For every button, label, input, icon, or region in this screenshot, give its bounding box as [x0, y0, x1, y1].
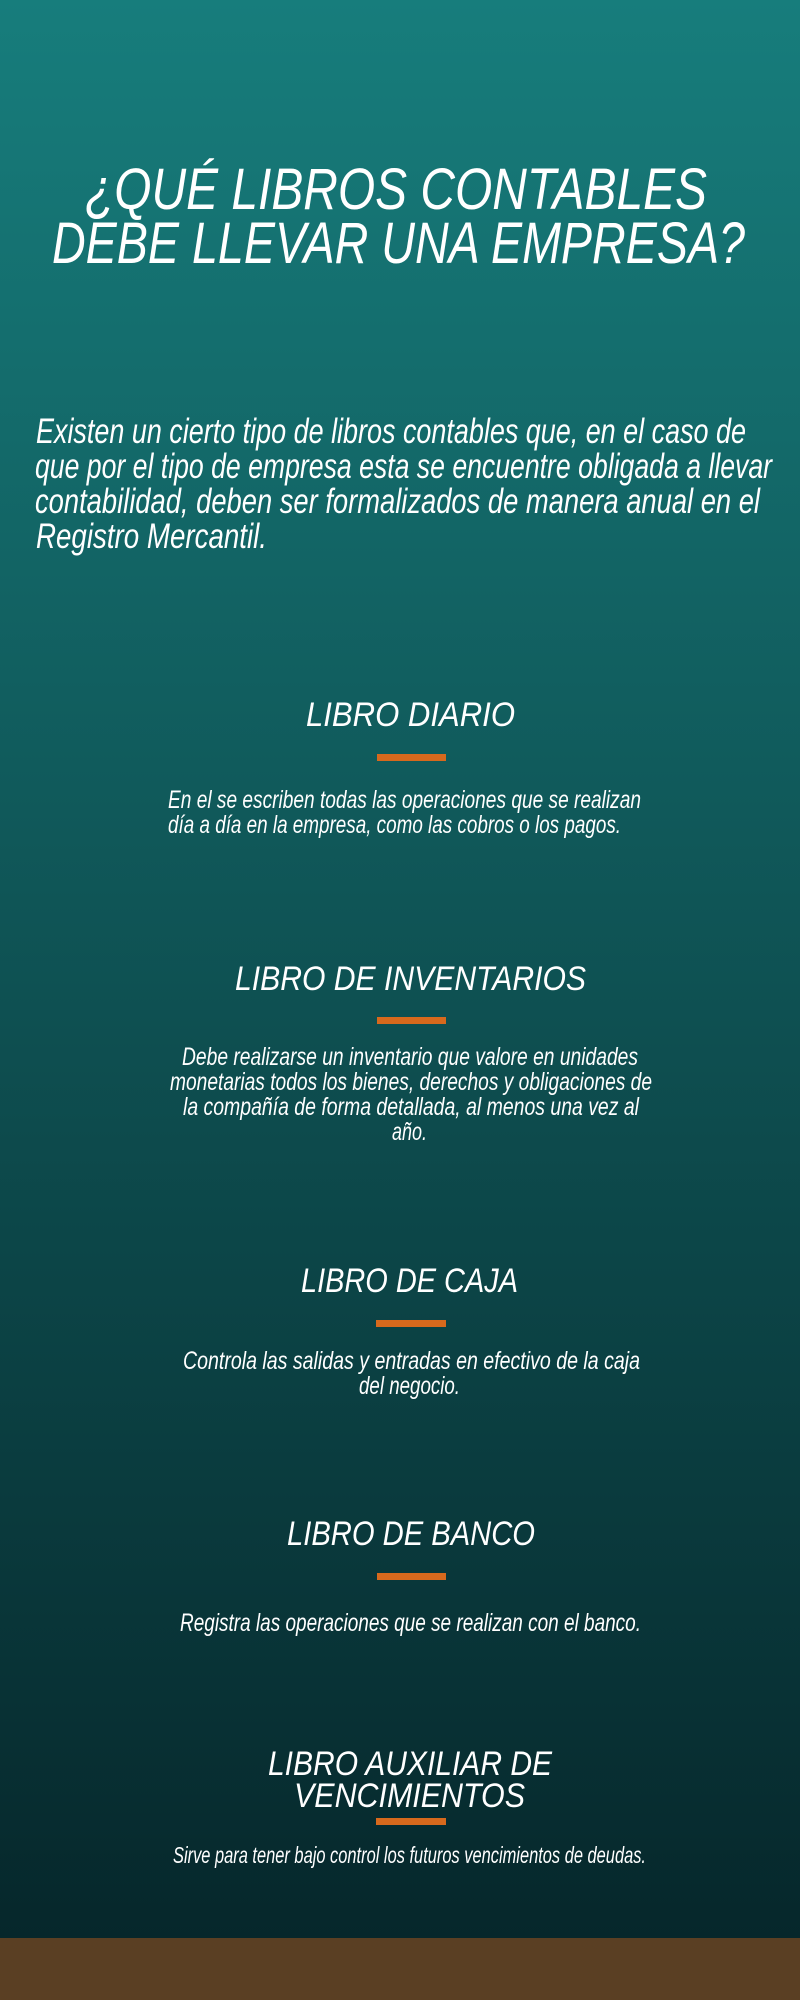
description: libro diario: [168, 786, 641, 839]
orange divider: [376, 1320, 446, 1327]
orange divider: [376, 1818, 446, 1825]
heading: libro auxiliar de vencimientos: LIBRO AUXILIAR DE: [268, 1745, 552, 1783]
description: libro de inventarios: año.: [392, 1118, 427, 1146]
heading: libro de inventarios: LIBRO DE INVENTARIOS: [235, 960, 586, 998]
description: libro de inventarios: la compañía de forma detallada, al menos una vez al: [183, 1093, 640, 1121]
section: libro de inventarios: [170, 960, 652, 1146]
description: libro de caja: Controla las salidas y entradas en efectivo de la caja: [183, 1347, 640, 1375]
heading: libro de banco: LIBRO DE BANCO: [287, 1515, 535, 1553]
footer band: [0, 1938, 800, 2000]
intro paragraph: [35, 412, 773, 556]
intro paragraph: Registro Mercantil.: [36, 517, 267, 556]
heading: libro diario: LIBRO DIARIO: [306, 696, 515, 734]
heading: libro auxiliar de vencimientos: VENCIMIENTOS: [294, 1777, 525, 1815]
description: libro de inventarios: monetarias todos los bienes, derechos y obligaciones de: [170, 1068, 652, 1096]
description: libro diario: día a día en la empresa, como las cobros o los pagos.: [168, 811, 621, 839]
orange divider: [377, 754, 446, 761]
description: libro de inventarios: Debe realizarse un inventario que valore en unidades: [182, 1043, 638, 1071]
title: [52, 157, 746, 276]
orange divider: [377, 1017, 446, 1024]
description: libro de caja: del negocio.: [359, 1372, 460, 1400]
section: libro diario: [168, 696, 641, 839]
orange divider: [377, 1573, 446, 1580]
description: libro diario: En el se escriben todas las operaciones que se realizan: [168, 786, 641, 814]
section: libro auxiliar de vencimientos: [173, 1745, 646, 1868]
section: libro de banco: [180, 1515, 641, 1637]
description: libro de banco: Registra las operaciones que se realizan con el banco.: [180, 1609, 641, 1637]
description: libro de inventarios: [170, 1043, 652, 1146]
description: libro de caja: [183, 1347, 640, 1400]
heading: libro de caja: LIBRO DE CAJA: [301, 1262, 518, 1300]
section: libro de caja: [183, 1262, 640, 1400]
heading: libro auxiliar de vencimientos: [268, 1745, 552, 1815]
